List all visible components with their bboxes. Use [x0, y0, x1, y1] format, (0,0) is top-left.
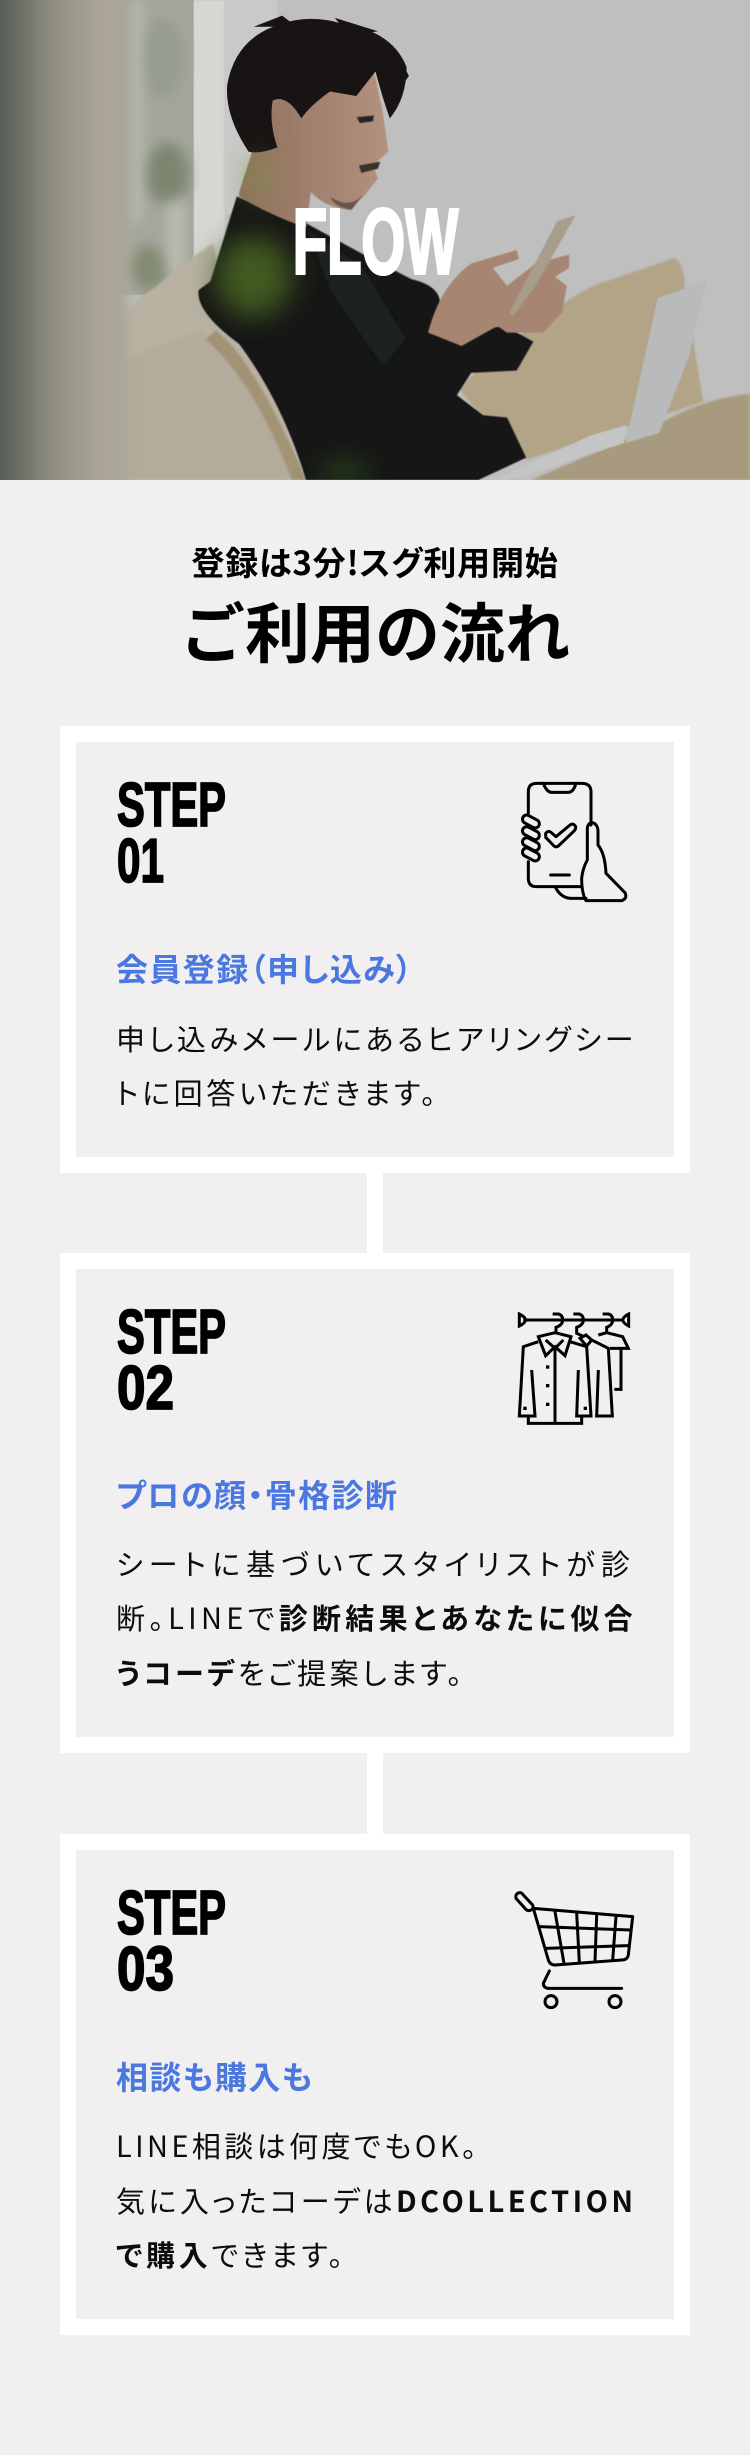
subheading: 登録は3分!スグ利用開始: [191, 537, 559, 585]
cushion: [459, 258, 703, 460]
step title: 相談も購入も: [116, 2053, 314, 2099]
step body text: シートに基づいてスタイリストが診: [116, 1542, 636, 1584]
icon: phone in hand: [520, 782, 628, 902]
step body text: [116, 1017, 637, 1113]
card frame: [60, 726, 690, 1173]
connector 1: [367, 1173, 383, 1253]
step body text: [116, 1542, 637, 1693]
hair: [227, 16, 409, 152]
laptop: [497, 280, 707, 480]
connector 2: [367, 1753, 383, 1834]
step body text: 気に入ったコーデはDCOLLECTION: [116, 2179, 637, 2221]
step body text: LINE相談は何度でもOK。: [116, 2124, 480, 2166]
main heading: ご利用の流れ: [180, 582, 570, 676]
hero photo: man on sofa using smartphone: [0, 0, 750, 480]
step body text: [116, 2124, 637, 2275]
icon: shirts on rail: [518, 1312, 631, 1425]
card frame: [60, 1253, 690, 1753]
trousers: [531, 394, 750, 480]
panel: step 03: [60, 1834, 690, 2335]
icon: shopping cart: [514, 1891, 634, 2010]
step label 01: [117, 775, 226, 890]
sofa: [110, 243, 306, 480]
step body text: で購入できます。: [116, 2233, 347, 2275]
FLOW heading: FLOW: [293, 190, 458, 294]
step label 03: [117, 1883, 226, 1998]
step body text: 断。LINEで診断結果とあなたに似合: [116, 1596, 637, 1638]
left pillar blur: [0, 0, 129, 500]
step body text: 申し込みメールにあるヒアリングシー: [116, 1017, 637, 1059]
foreground leaves: [215, 159, 368, 487]
step title: 会員登録（申し込み）: [116, 945, 414, 991]
step body text: トに回答いただきます。: [116, 1071, 439, 1113]
neck and face: [239, 67, 388, 228]
hands and phone: [428, 215, 575, 346]
step body text: うコーデをご提案します。: [116, 1651, 465, 1693]
ear: [270, 99, 292, 138]
panel: step 01: [60, 726, 690, 1173]
panel: step 02: [60, 1253, 690, 1753]
step label 02: [117, 1302, 226, 1417]
card frame: [60, 1834, 690, 2335]
step title: プロの顔・骨格診断: [116, 1471, 398, 1517]
sweater: [198, 196, 533, 480]
